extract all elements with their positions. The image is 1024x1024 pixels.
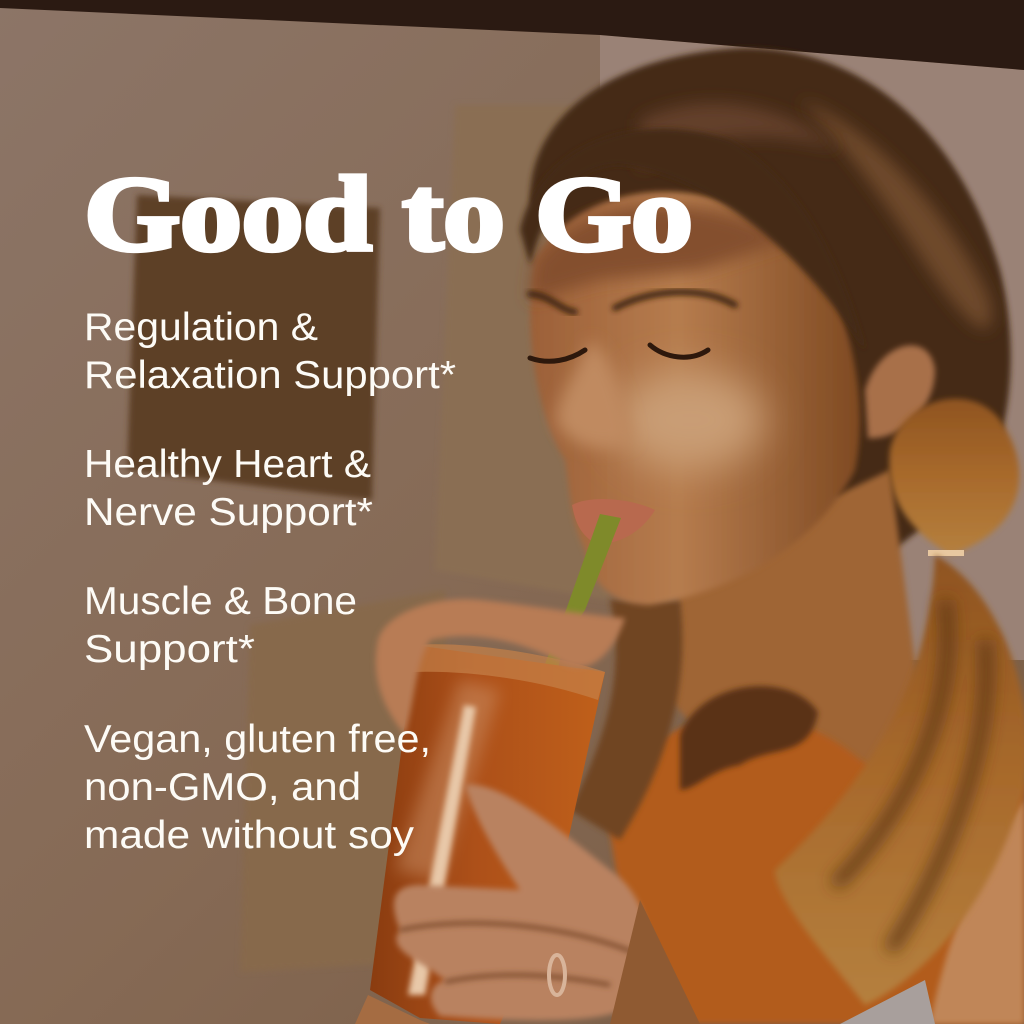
ceiling band — [0, 0, 1024, 70]
hairline over forehead — [520, 129, 865, 350]
benefit: regulation and relaxation: Regulation & — [84, 306, 318, 349]
glass — [370, 645, 605, 1024]
benefit: regulation and relaxation: Relaxation Support* — [84, 354, 456, 397]
title: Good to Go — [84, 156, 693, 274]
eyebrows — [530, 292, 735, 312]
benefits list — [84, 306, 456, 857]
glass reflection — [408, 705, 476, 995]
closed eyes — [530, 345, 708, 361]
dark square panel — [127, 195, 380, 500]
forearm at bottom — [355, 995, 430, 1024]
hair tie — [928, 550, 964, 556]
ring — [549, 955, 565, 995]
benefit: regulation and relaxation — [84, 306, 456, 397]
neck — [670, 470, 925, 820]
hair highlights — [800, 100, 992, 329]
nose highlight — [556, 340, 632, 448]
ear — [865, 345, 935, 438]
left hair lock — [570, 600, 682, 840]
lips — [572, 499, 655, 543]
top strap — [840, 980, 935, 1024]
glass rim — [412, 644, 605, 700]
dark ponytail strands — [835, 600, 986, 950]
forehead shade — [530, 205, 790, 300]
ponytail lower — [775, 555, 1024, 1005]
benefit: vegan and gluten free: Vegan, gluten free, — [84, 718, 431, 761]
arm — [610, 900, 700, 1024]
benefit: muscle and bone: Muscle & Bone — [84, 580, 357, 623]
lower wall panel — [240, 590, 450, 972]
right shoulder — [930, 800, 1024, 1024]
right wall — [600, 35, 1024, 660]
finger creases — [400, 923, 640, 985]
benefit: heart and nerve: Healthy Heart & — [84, 443, 371, 486]
shadow on chest — [680, 686, 818, 790]
upper wall panel — [435, 105, 610, 600]
straw — [534, 514, 621, 692]
back of hair — [530, 48, 1011, 560]
chest and shoulder — [605, 715, 1024, 1024]
lower hand — [394, 785, 651, 1020]
cheek highlight — [615, 370, 765, 470]
benefit: muscle and bone: Support* — [84, 628, 255, 671]
benefit: vegan and gluten free: made without soy — [84, 814, 415, 857]
bubbles highlight — [395, 680, 500, 880]
benefit: heart and nerve — [84, 443, 373, 534]
face — [530, 192, 860, 605]
ponytail upper — [889, 399, 1019, 555]
benefit: vegan and gluten free — [84, 718, 431, 857]
benefit: heart and nerve: Nerve Support* — [84, 491, 373, 534]
upper hand fingers — [376, 599, 625, 735]
benefit: muscle and bone — [84, 580, 357, 671]
benefit: vegan and gluten free: non-GMO, and — [84, 766, 361, 809]
